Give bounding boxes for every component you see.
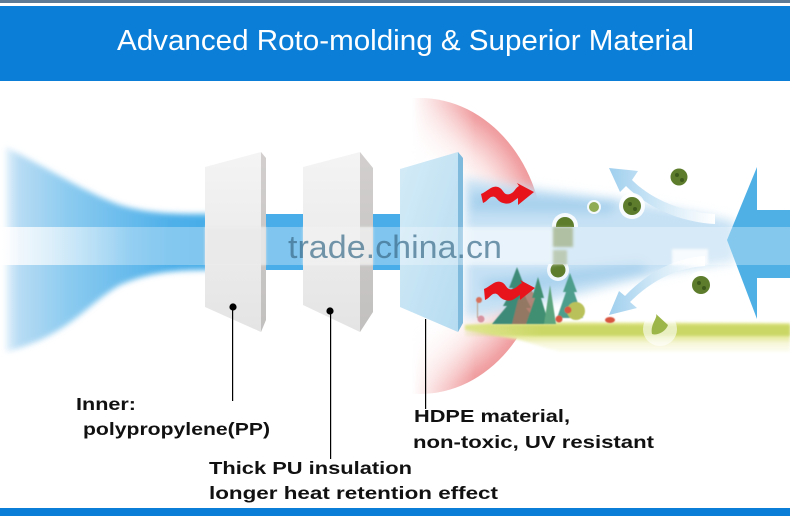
- airflow: left funnel and centre band: [6, 147, 400, 352]
- panel: inner polypropylene layer: [205, 152, 266, 332]
- label: HDPE material: [413, 406, 654, 452]
- label: inner polypropylene: Inner:: [76, 394, 136, 414]
- leader line: HDPE layer: [425, 319, 426, 409]
- label: PU insulation: [209, 458, 498, 503]
- red wavy heat arrow: lower: [484, 280, 535, 301]
- germ: cut by watermark top: [552, 213, 578, 227]
- leader line: inner layer: [229, 303, 237, 401]
- panel: PU insulation layer: [303, 152, 373, 332]
- heat dome: red crescent: [418, 98, 536, 394]
- panel: HDPE outer layer: [400, 152, 463, 332]
- trees and flowers: [476, 267, 615, 324]
- top photo strip: [0, 0, 790, 3]
- watermark band: [0, 227, 790, 265]
- watermark text: trade.china.cn: [288, 229, 502, 265]
- label: inner polypropylene: polypropylene(PP): [83, 419, 270, 439]
- grass strip: [465, 322, 790, 352]
- bottom bar: [0, 508, 790, 516]
- label: inner polypropylene: [76, 394, 270, 439]
- germs: [547, 168, 715, 299]
- germ: lower right: [687, 271, 715, 299]
- label: HDPE material: HDPE material,: [414, 406, 570, 426]
- header banner: [0, 6, 790, 81]
- leader line: PU layer: [326, 307, 334, 459]
- germ: upper centre: [619, 193, 645, 219]
- germ: small spore: [587, 200, 601, 214]
- curved arrow: lower: [609, 256, 705, 315]
- germ: top right: [670, 168, 688, 186]
- germ: cut by watermark bottom: [547, 264, 569, 281]
- title: Advanced Roto-molding & Superior Material: [117, 25, 694, 57]
- air streaks right of the dome: [465, 178, 735, 318]
- curved arrow: upper: [609, 168, 715, 224]
- label: PU insulation: longer heat retention effect: [209, 483, 498, 503]
- large blue arrow from right: [727, 167, 790, 319]
- icon: chameleon bubble: [643, 312, 677, 346]
- label: HDPE material: non-toxic, UV resistant: [413, 432, 654, 452]
- red wavy heat arrow: upper: [481, 183, 534, 205]
- label: PU insulation: Thick PU insulation: [209, 458, 412, 478]
